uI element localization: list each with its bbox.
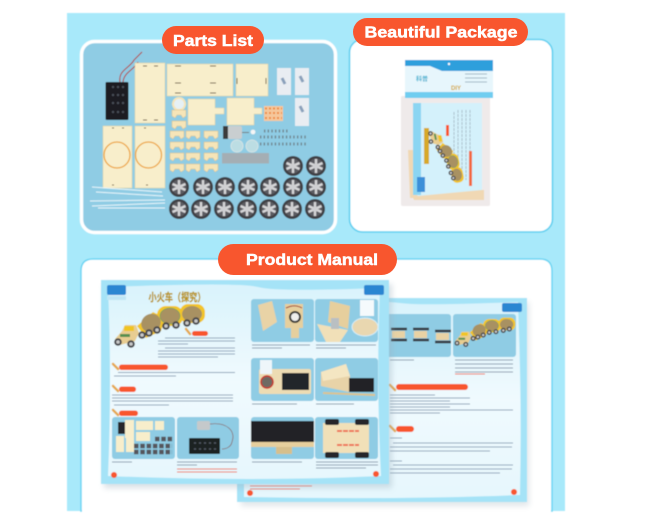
note heading [390,384,468,390]
wheels [169,156,326,219]
heading: Beautiful Package [353,18,528,46]
logo [502,303,522,312]
step caption row 3 [252,462,378,468]
rubber bands [104,142,162,168]
step photo 4 [315,358,378,401]
panel: beautiful package [350,40,552,232]
heading: Parts List: Parts List [173,33,254,50]
gears and strip [222,140,269,164]
step photo 6 [315,417,378,459]
logo [107,285,126,300]
page number [111,472,117,478]
heading: Product Manual [218,244,397,275]
header card: DIY [451,86,461,92]
step photo 1 [251,299,314,342]
heading: Beautiful Package: Beautiful Package [364,24,518,42]
section pill: steps [113,410,138,416]
manual front page [101,280,392,488]
icon: battery box with wires [106,52,142,120]
principle text [112,395,233,405]
photo: assembled train [453,314,516,357]
zip ties [90,187,165,208]
step captions [112,462,237,465]
manual title: 小火车（探究） [148,290,206,304]
background panel [67,13,565,511]
logo right [364,285,384,295]
wooden boards [103,63,268,188]
panel: product manual [81,259,552,512]
goal text [114,372,235,376]
package train [426,126,465,187]
knowledge heading [390,426,414,432]
step caption row 1 [252,345,376,348]
step caption row 2 [252,403,354,405]
motor [223,126,255,139]
section pill: intro [186,329,208,336]
heading: Product Manual: Product Manual [246,252,378,269]
instruction card [413,103,482,196]
section pill: principle [113,386,136,392]
page number right [373,471,379,477]
foam tapes [277,68,309,126]
knowledge text [390,438,513,473]
page number right [511,489,517,495]
main train [114,304,205,348]
photo: train cars [380,314,451,357]
note text [390,395,513,413]
clear bag [401,96,490,206]
step photo: parts [112,417,175,459]
red note and page number left [247,486,312,496]
header card [405,60,493,98]
captions [390,360,513,372]
intro text [158,338,235,357]
panel: parts list [82,42,336,232]
step photo: motor and battery [177,417,239,459]
section pill: goal [113,364,168,370]
manual back page [237,298,529,506]
heading: Parts List [162,26,264,54]
step photo 3 [251,358,314,401]
screws [260,131,307,144]
step photo 5 [251,417,314,459]
orange foam dots [264,106,283,121]
step photo 2 [315,299,378,342]
small clips [170,98,218,172]
header card: 科普 [416,75,428,83]
